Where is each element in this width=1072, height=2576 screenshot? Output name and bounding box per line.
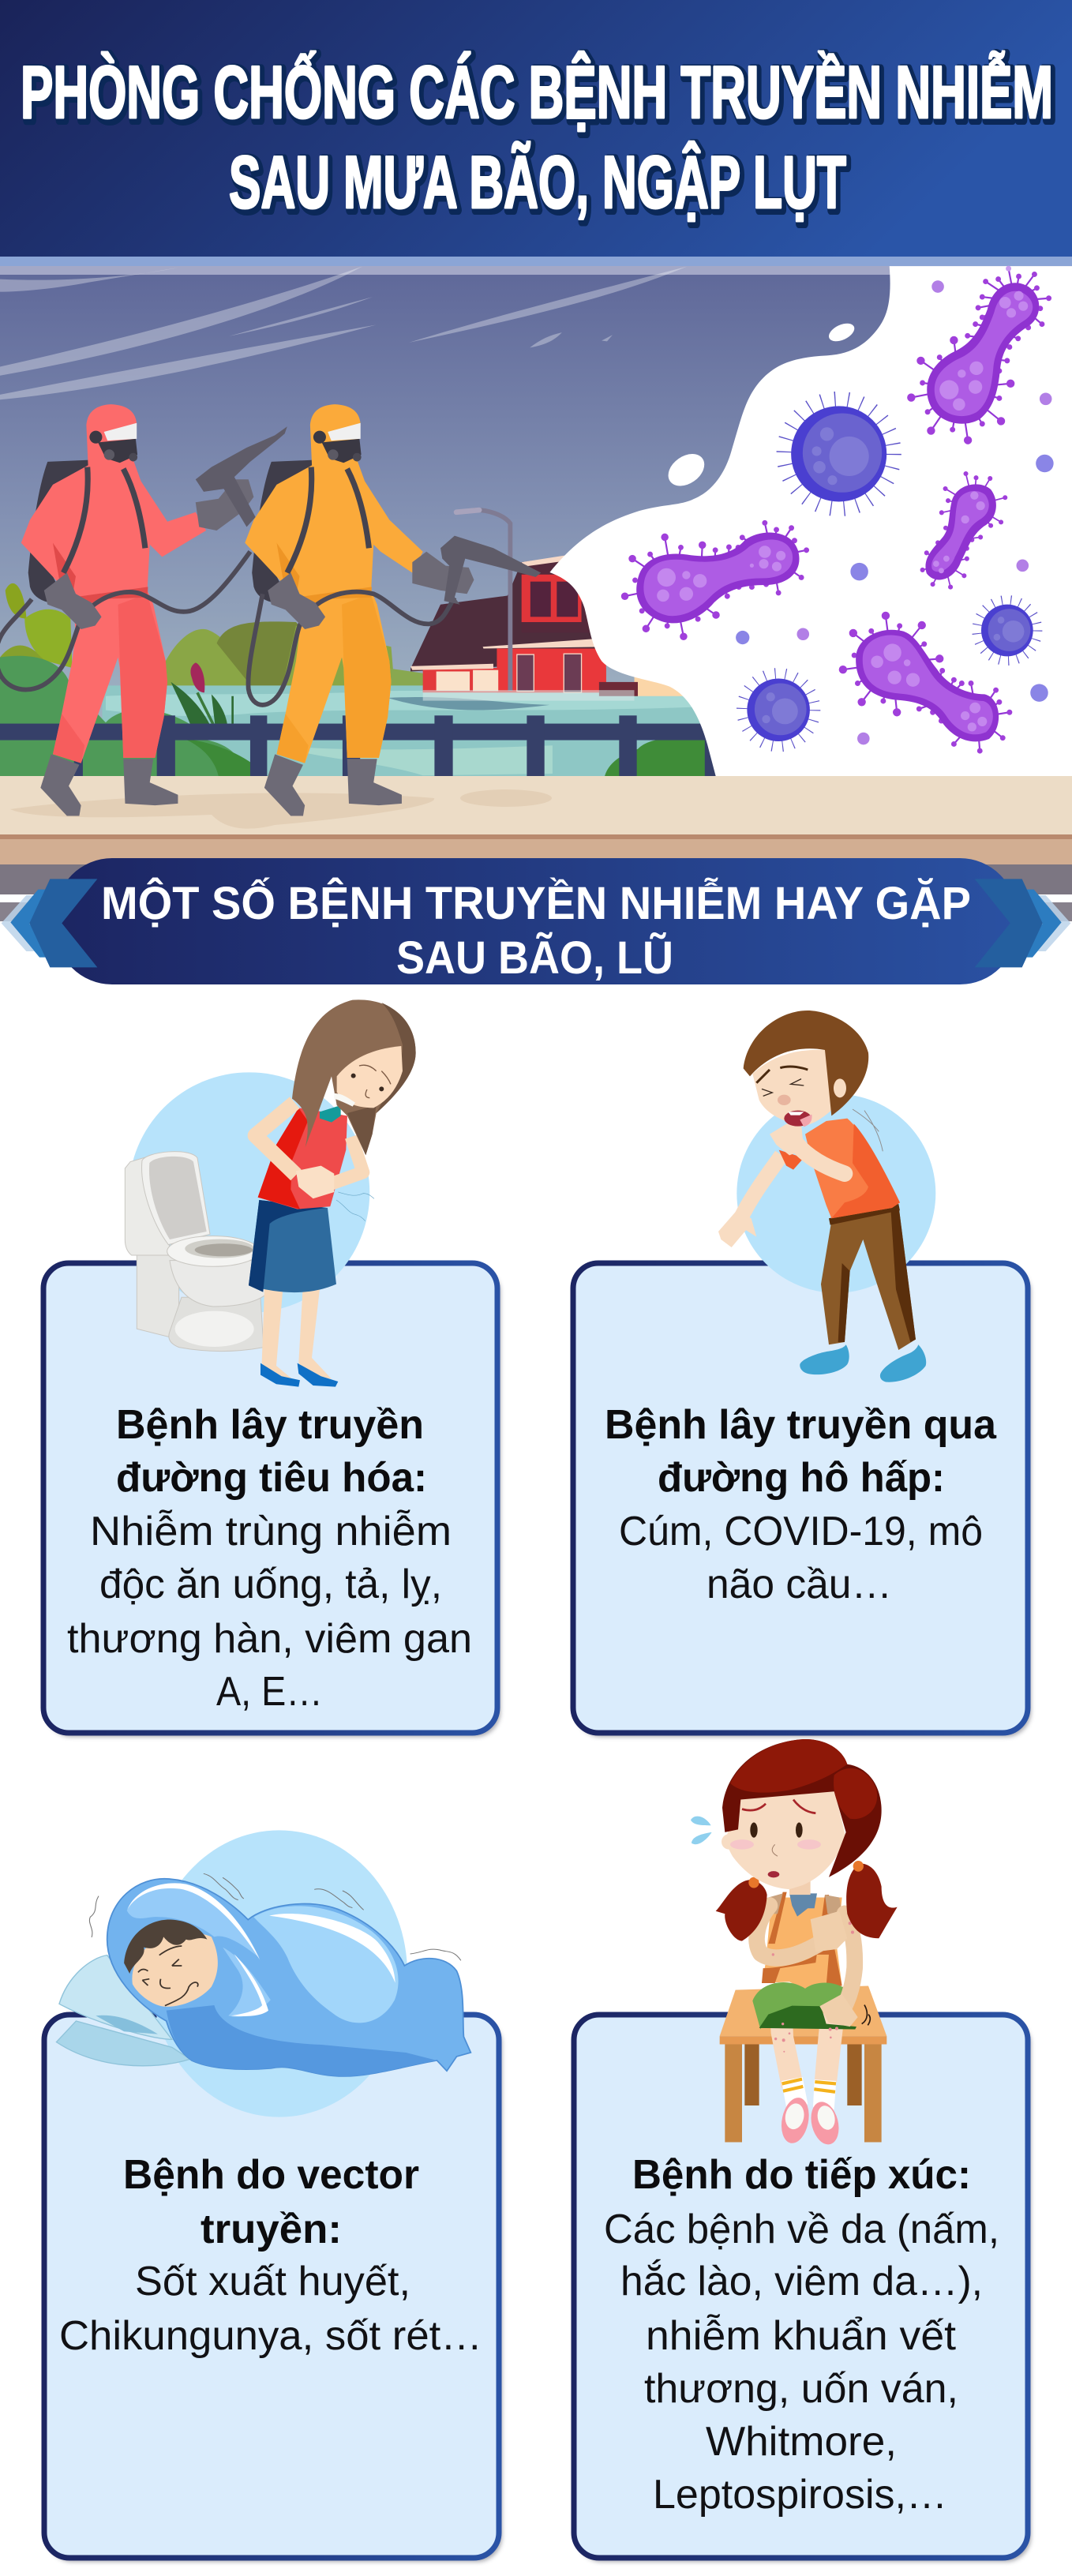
banner heading: SAU BÃO, LŨ [396, 932, 673, 984]
fence [0, 715, 722, 776]
gloves [268, 573, 325, 629]
worker: red suit [0, 404, 287, 816]
legs and shoes [770, 2004, 805, 2093]
card text: độc ăn uống, tả, lỵ, [99, 1562, 442, 1607]
virus: blue right [977, 600, 1037, 661]
card heading: đường tiêu hóa: [116, 1455, 427, 1501]
card text: A, E… [216, 1669, 323, 1715]
pillows [56, 2021, 190, 2066]
card heading: đường hô hấp: [658, 1455, 945, 1501]
street lamp [456, 510, 510, 691]
illustration: girl with stomach ache beside toilet [125, 999, 416, 1387]
illustration: child shivering under blanket [56, 1830, 470, 2117]
suit [245, 404, 423, 763]
virus: purple left [625, 523, 807, 636]
gloves [44, 573, 102, 629]
panel: contact diseases [574, 1739, 1031, 2562]
card heading: Bệnh do vector [123, 2152, 419, 2198]
boots [264, 754, 305, 816]
straps [287, 467, 369, 573]
toilet [125, 1152, 266, 1352]
card text [59, 2259, 482, 2359]
spray gun [196, 426, 287, 527]
card text [604, 2207, 999, 2518]
virus: purple top right [911, 268, 1049, 441]
card heading: Bệnh lây truyền [116, 1402, 424, 1448]
backpack [252, 460, 313, 605]
card text: Cúm, COVID-19, mô [619, 1509, 983, 1554]
title [21, 51, 1055, 226]
illustration: girl scratching skin on a chair [691, 1739, 898, 2147]
card text: Nhiễm trùng nhiễm [90, 1509, 452, 1554]
boots [40, 754, 81, 816]
virus particles [736, 280, 1054, 744]
hose [248, 592, 455, 705]
olive leaves [6, 583, 26, 619]
card text: Chikungunya, sốt rét… [59, 2313, 482, 2359]
card heading [123, 2152, 419, 2252]
head [752, 1050, 837, 1127]
blanket highlights [127, 1883, 260, 1960]
ponytails [716, 1880, 767, 1941]
face and hair [132, 1933, 218, 2007]
virus: blue large [784, 399, 894, 508]
panel: respiratory diseases [573, 1011, 1031, 1737]
water mist [423, 690, 635, 701]
virus: purple bottom right [843, 616, 1010, 751]
bushes behind the fence [0, 656, 190, 724]
section banner [2, 858, 1070, 984]
card text: Các bệnh về da (nấm, [604, 2207, 999, 2252]
banner heading [101, 878, 971, 984]
card text: não cầu… [707, 1562, 892, 1607]
chair [720, 1985, 886, 2142]
shirt [805, 1119, 900, 1218]
panel: vector-borne diseases [44, 1830, 502, 2562]
goggles and mask [104, 423, 137, 441]
card text: thương hàn, viêm gan [67, 1616, 472, 1662]
card text [619, 1509, 983, 1607]
goggles and mask [328, 423, 361, 441]
rash spots [772, 1922, 854, 2053]
dress and skirt [762, 1898, 842, 1990]
trousers [821, 1206, 916, 1350]
panel: digestive diseases [43, 999, 500, 1737]
hills [0, 646, 70, 696]
head [789, 1881, 811, 1895]
straps [63, 467, 145, 573]
sky [0, 257, 1072, 778]
flood water [102, 685, 737, 777]
shoes [800, 1344, 849, 1374]
illustration: coughing boy [718, 1011, 935, 1382]
card text: hắc lào, viêm da…), [620, 2259, 983, 2304]
card heading: truyền: [201, 2207, 342, 2252]
card heading [605, 1402, 997, 1501]
card text: Whitmore, [706, 2419, 897, 2465]
reeds [171, 662, 233, 724]
worker: yellow suit [245, 404, 541, 816]
card text: thương, uốn ván, [644, 2366, 958, 2412]
card heading: Bệnh do tiếp xúc: [632, 2152, 971, 2198]
card heading: Bệnh lây truyền qua [605, 1402, 997, 1448]
illustration: flood disinfection scene [0, 257, 1072, 921]
virus: purple right small [923, 474, 1005, 587]
house [410, 552, 705, 696]
left chevrons [2, 879, 97, 967]
right chevrons [975, 879, 1070, 967]
arms [757, 1906, 823, 1958]
header background [0, 0, 1072, 257]
card text [67, 1509, 472, 1715]
virus: blue bottom [742, 673, 815, 746]
white cloud of viruses [549, 266, 1072, 777]
hose [0, 552, 250, 690]
suit [21, 404, 206, 763]
blanket [107, 1879, 470, 2076]
spray gun [440, 536, 541, 605]
card text: Leptospirosis,… [653, 2472, 947, 2518]
background landscape, house, fence, figures [0, 510, 737, 777]
card text: Sốt xuất huyết, [135, 2259, 410, 2304]
card heading [116, 1402, 427, 1501]
ground [0, 776, 1072, 921]
sky streaks [0, 267, 687, 399]
collar [789, 1893, 817, 1917]
girl [249, 999, 416, 1387]
backpack [28, 460, 90, 605]
card text: nhiễm khuẩn vết [646, 2313, 957, 2359]
banner heading: MỘT SỐ BỆNH TRUYỀN NHIỄM HAY GẶP [101, 878, 971, 929]
